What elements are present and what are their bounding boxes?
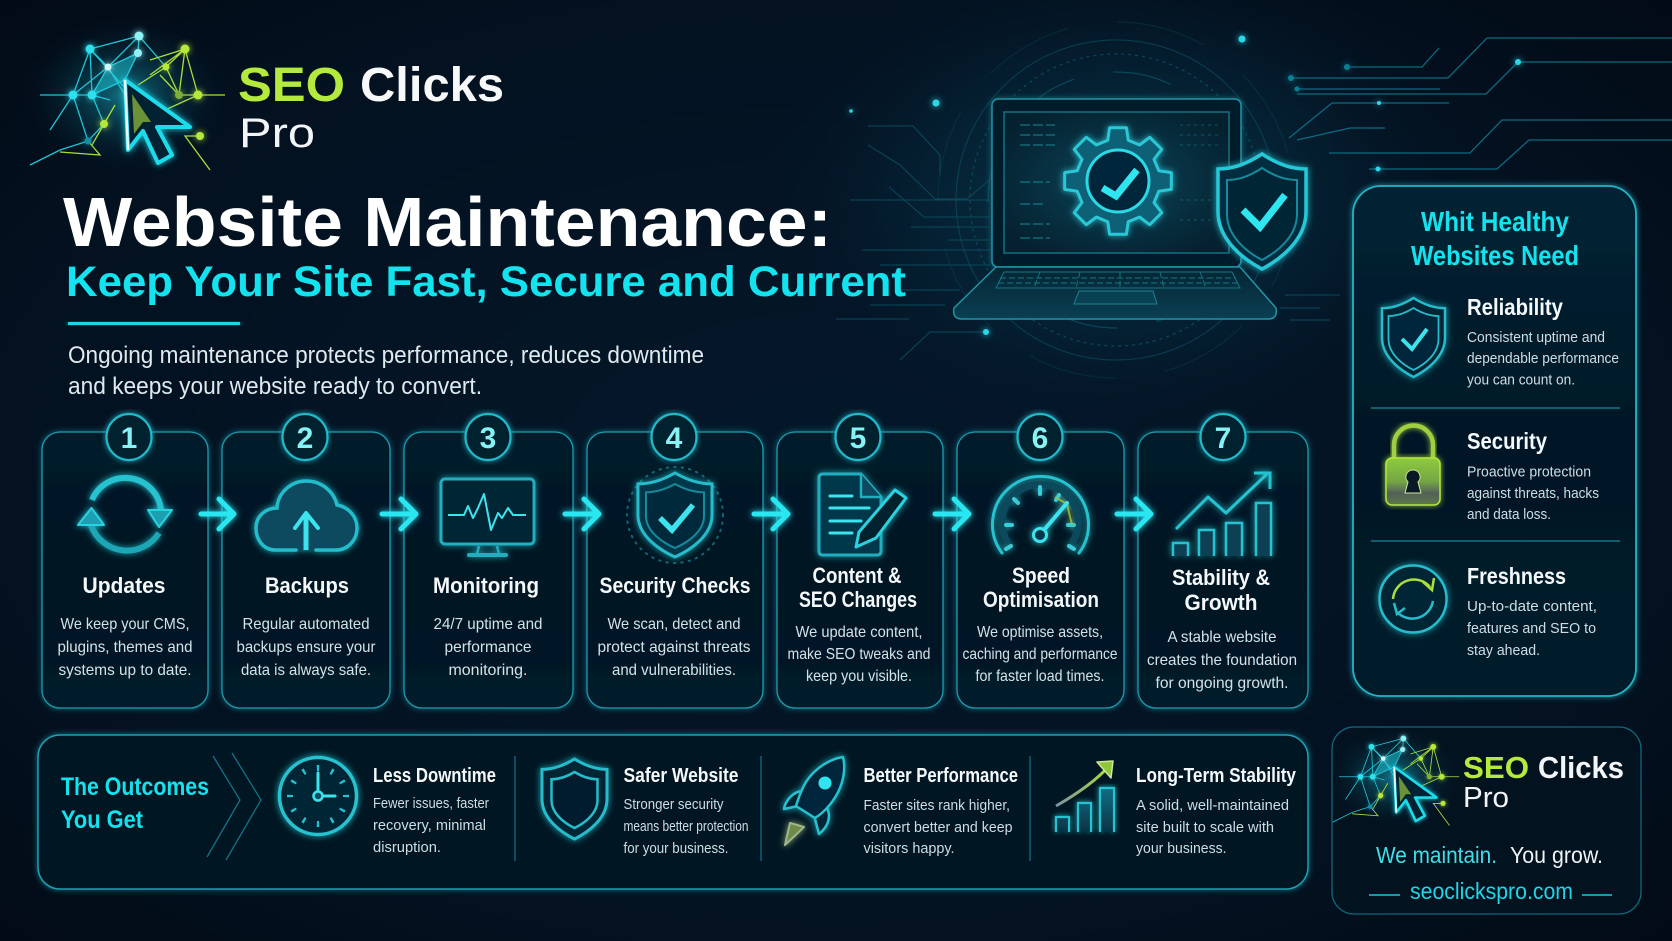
text: better performance: convert better and keep (864, 819, 1012, 836)
icon: rocket (784, 757, 844, 845)
text: freshness: Up-to-date content, (1467, 598, 1597, 615)
description (58, 616, 192, 679)
heading: Whit Healthy (1421, 206, 1569, 237)
intro paragraph: Ongoing maintenance protects performance, reduces downtime (68, 342, 704, 369)
tagline: You grow. (1510, 842, 1603, 868)
hero illustration: laptop with gear and shield over circuit lines (760, 0, 1672, 435)
brand name: Pro (239, 109, 315, 156)
heading: Stability and Growth (1172, 565, 1270, 615)
description: caching and performance (962, 646, 1118, 663)
brand name: SEO (238, 59, 345, 112)
panel: step 5 content and SEO changes (777, 414, 943, 708)
icon: shield check (1382, 298, 1445, 377)
text: less downtime: Less Downtime (373, 765, 496, 787)
text: security: and data loss. (1467, 506, 1551, 523)
brand name (1463, 750, 1624, 814)
description: systems up to date. (58, 662, 192, 679)
panel: step 4 security checks (587, 414, 763, 708)
text: freshness (1467, 563, 1597, 659)
description (962, 624, 1118, 685)
text: security: against threats, hacks (1467, 485, 1599, 502)
text: better performance: visitors happy. (864, 840, 954, 857)
description: data is always safe. (241, 662, 371, 679)
heading: Speed Optimisation: Optimisation (983, 587, 1099, 612)
text: less downtime: recovery, minimal (373, 817, 486, 834)
arrow: step 6 to 7 (1117, 499, 1151, 529)
logo: SEO Clicks Pro (20, 15, 504, 175)
step number 5: 5 (850, 422, 866, 455)
heading: Backups: Backups (265, 573, 349, 598)
step number 6 (1018, 414, 1062, 460)
icon: shield with check (1218, 154, 1306, 269)
brand name: Clicks (360, 59, 504, 112)
text: better performance (864, 765, 1018, 857)
outcome: better performance (784, 757, 1018, 857)
icon: refresh circle (1380, 566, 1446, 632)
step number 4: 4 (666, 422, 683, 455)
icon: shield check (627, 467, 723, 563)
panel: the outcomes you get (38, 735, 1308, 889)
description: We update content, (796, 624, 922, 641)
description (1147, 629, 1297, 692)
text: better performance: Faster sites rank higher, (864, 797, 1010, 814)
description: performance (444, 639, 532, 656)
description: We scan, detect and (608, 616, 740, 633)
title: Website Maintenance: (63, 183, 832, 261)
description: plugins, themes and (58, 639, 192, 656)
icon: padlock (1386, 426, 1440, 505)
arrow: step 3 to 4 (565, 499, 599, 529)
panel: step 6 speed optimisation (957, 414, 1124, 708)
arrow: step 2 to 3 (382, 499, 416, 529)
icon: document and pencil (819, 474, 906, 555)
description: A stable website (1168, 629, 1277, 646)
description: backups ensure your (236, 639, 376, 656)
step number 7: 7 (1215, 422, 1231, 455)
text: freshness: stay ahead. (1467, 642, 1540, 659)
icon: refresh arrows (78, 478, 172, 551)
text: reliability: you can count on. (1467, 372, 1575, 388)
arrow: step 4 to 5 (754, 499, 788, 529)
underline accent (68, 322, 240, 325)
intro paragraph (68, 342, 704, 400)
heading (1411, 206, 1579, 271)
heading: Speed Optimisation: Speed (1012, 563, 1070, 588)
description: monitoring. (448, 662, 528, 679)
description: We optimise assets, (977, 624, 1103, 641)
icon: network cursor (20, 15, 230, 175)
panel: footer brand card (1326, 725, 1641, 914)
text: freshness: Freshness (1467, 563, 1566, 589)
heading: Updates: Updates (82, 573, 166, 598)
heading: Stability and Growth: Stability & (1172, 565, 1270, 590)
heading: The Outcomes You Get (61, 773, 209, 834)
item: security (1386, 426, 1599, 523)
heading: Stability and Growth: Growth (1184, 590, 1258, 615)
tagline (1376, 842, 1603, 868)
icon: clock (280, 758, 356, 834)
item: reliability (1382, 294, 1619, 388)
heading: Websites Need (1411, 240, 1579, 271)
text: safer website: means better protection (624, 818, 748, 835)
laptop (954, 99, 1306, 319)
panel: what healthy websites need (1353, 186, 1636, 696)
heading: Speed Optimisation (983, 563, 1099, 612)
outcome: less downtime (280, 758, 496, 856)
brand name: Clicks (1538, 750, 1624, 785)
website url: seoclickspro.com (1410, 878, 1573, 904)
icon: cloud upload (256, 481, 357, 550)
step number 1 (106, 414, 152, 460)
text: safer website: Safer Website (624, 765, 738, 787)
text: less downtime: disruption. (373, 839, 441, 856)
description (236, 616, 376, 679)
text: safer website (624, 765, 748, 857)
text: long-term stability (1136, 765, 1297, 857)
panel: step 7 stability and growth (1138, 414, 1308, 708)
step number 5 (836, 414, 880, 460)
brand name (238, 59, 504, 156)
outcome: long-term stability (1056, 761, 1297, 857)
text: freshness: features and SEO to (1467, 620, 1596, 637)
heading: Content and SEO Changes (799, 563, 917, 612)
heading: Monitoring: Monitoring (433, 573, 539, 598)
heading: Security Checks: Security Checks (600, 573, 750, 598)
description: make SEO tweaks and (788, 646, 930, 663)
brand name: Pro (1463, 782, 1509, 814)
step number 2 (282, 414, 328, 460)
brand name: SEO (1463, 750, 1529, 785)
description (598, 616, 750, 679)
subtitle: Keep Your Site Fast, Secure and Current (66, 258, 906, 306)
text: better performance: Better Performance (864, 765, 1018, 787)
text: long-term stability: your business. (1136, 840, 1226, 857)
text: reliability (1467, 294, 1619, 388)
tagline: We maintain. (1376, 842, 1497, 868)
description: We keep your CMS, (60, 616, 190, 633)
text: security: Proactive protection (1467, 464, 1591, 480)
text: long-term stability: A solid, well-maintained (1136, 797, 1289, 814)
text: safer website: for your business. (624, 840, 728, 857)
step number 1: 1 (121, 422, 137, 455)
text: reliability: dependable performance (1467, 350, 1619, 367)
panel: step 1 updates (42, 414, 208, 708)
circuit lines and rings (836, 22, 1672, 378)
step number 4 (652, 414, 696, 460)
description: keep you visible. (806, 668, 912, 685)
intro paragraph: and keeps your website ready to convert. (68, 373, 482, 400)
heading: The Outcomes You Get: The Outcomes (61, 773, 209, 801)
description: for faster load times. (976, 668, 1104, 685)
icon: speedometer (993, 476, 1088, 553)
icon: shield (542, 759, 607, 839)
description: Regular automated (242, 616, 370, 633)
arrow: step 5 to 6 (935, 499, 969, 529)
step number 7 (1200, 414, 1246, 460)
heading: Content and SEO Changes: Content & (812, 563, 902, 588)
step number 3 (466, 414, 510, 460)
step number 6: 6 (1032, 422, 1048, 455)
icon: gear with check (1065, 128, 1171, 234)
description: protect against threats (598, 639, 750, 656)
panel: step 3 monitoring (404, 414, 573, 708)
description (434, 616, 542, 679)
arrow: step 1 to 2 (201, 499, 234, 529)
panel: step 2 backups (222, 414, 390, 708)
icon: monitor with pulse (441, 479, 534, 555)
outcome: safer website (542, 759, 748, 857)
description: 24/7 uptime and (434, 616, 542, 633)
text: safer website: Stronger security (624, 796, 724, 813)
description: for ongoing growth. (1156, 675, 1288, 692)
text: long-term stability: site built to scale with (1136, 819, 1274, 836)
text: reliability: Consistent uptime and (1467, 329, 1605, 346)
icon: growth chart (1173, 473, 1271, 556)
text: less downtime (373, 765, 496, 856)
heading: The Outcomes You Get: You Get (61, 806, 144, 834)
text: reliability: Reliability (1467, 294, 1563, 320)
step number 3: 3 (480, 422, 496, 455)
icon: mini logo (1326, 725, 1462, 829)
step number 2: 2 (297, 422, 313, 455)
heading: Content and SEO Changes: SEO Changes (799, 587, 917, 612)
description: creates the foundation (1147, 652, 1297, 669)
item: freshness (1380, 563, 1597, 659)
icon: bars and green arrow (1056, 761, 1114, 832)
text: security (1467, 428, 1599, 523)
text: security: Security (1467, 428, 1547, 454)
text: long-term stability: Long-Term Stability (1136, 765, 1297, 787)
text: less downtime: Fewer issues, faster (373, 795, 489, 812)
description (788, 624, 930, 685)
description: and vulnerabilities. (612, 662, 736, 679)
chevrons (207, 753, 261, 860)
